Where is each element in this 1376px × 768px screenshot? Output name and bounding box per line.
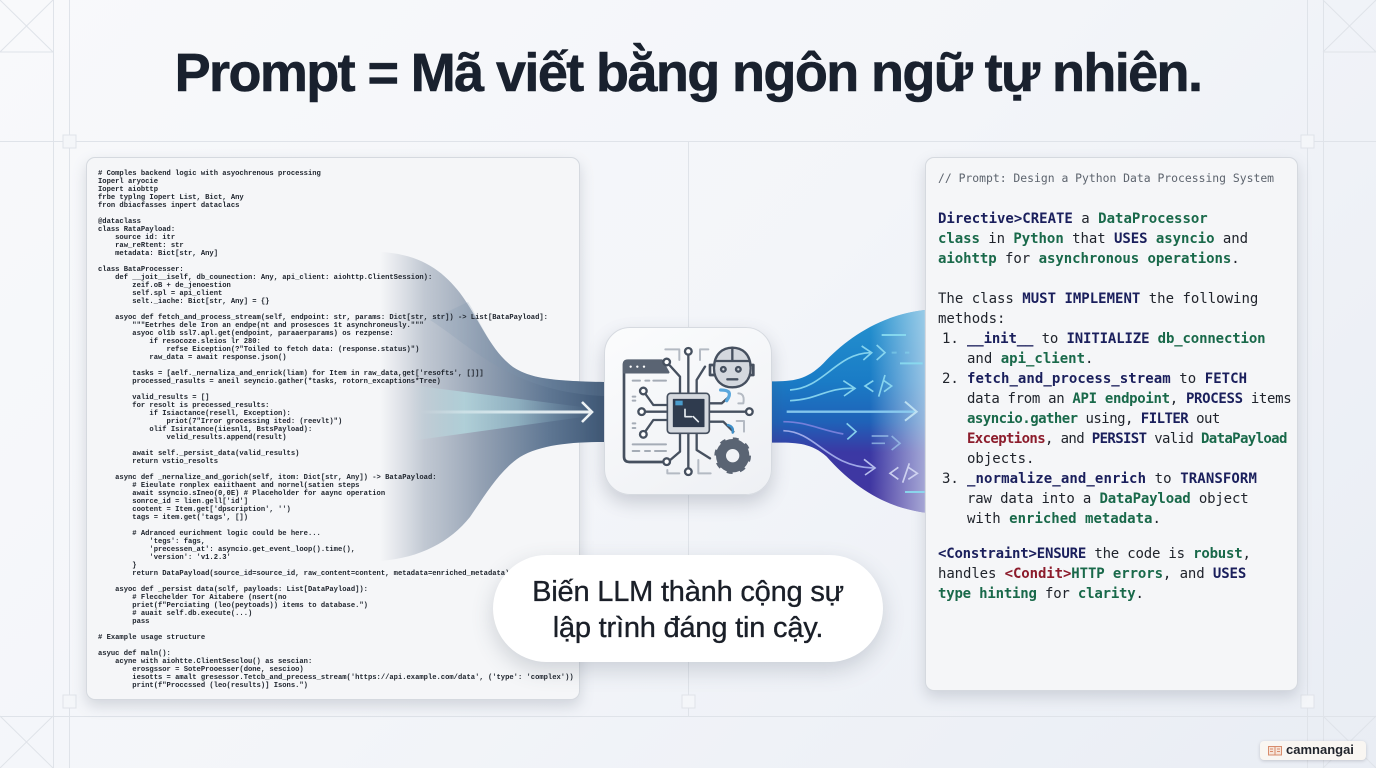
structured prompt text: class in Python that USES asyncio and: [938, 231, 1248, 247]
callout: Biến LLM thành cộng sự: [532, 576, 844, 608]
callout: lập trình đáng tin cậy.: [553, 612, 823, 644]
structured prompt text: <Constraint>ENSURE the code is robust,: [938, 546, 1251, 562]
structured prompt text: 3.: [942, 471, 959, 487]
structured prompt text: data from an API endpoint, PROCESS items: [967, 391, 1291, 407]
structured prompt text: aiohttp for asynchronous operations.: [938, 251, 1240, 267]
structured prompt text: The class MUST IMPLEMENT the following: [938, 291, 1258, 307]
watermark: [1260, 741, 1366, 760]
callout: [493, 555, 883, 662]
structured prompt text: asyncio.gather using, FILTER out: [967, 411, 1220, 427]
code block: complex backend logic: # Comples backend logic with asyochrenous processing Ioperl aryocie Iopert aiobttp frbe typlng Iopert List, Bict, Any fron dbiacfasses inpert dataclacs @dataclass class RataPayload: source id: itr raw_reRtent: str metadata: Bict[str, Any] class BataProcesser: def __joit__iself, db_counection: Any, api_client: aiohttp.ClientSession): zeif.oB + de_jenoestion self.spl = api_client selt._iache: Bict[str, Any] = {} asyoc def fetch_and_process_stream(self, endpoint: str, params: Dict[str, str]) -> List[BataPayload]: """Eetrhes dele Iron an endpe(nt and prosesces 1t asynchroneusly.""" asyoc ol1b ssl7.apl.get(endpoint, paraaerparams) os rezpense: if resocoze.sleios lr 280: refse Eiception(?"Toiled to fetch data: (response.status)") raw_data = await response.json() tasks = [aelf._nernaliza_and_enrick(liam) for Item in raw_data,get['resofts', []]] processed_rasults = aneil seyncio.gather(*tasks, rotorn_excaptions*Tree) valid_results = [] for resolt is precessed_results: if Isiactance(resell, Exception): priot(7"Irror grocessing ited: (reevlt)") olif Isiratance(iiesnl1, BstsPayload): velid_results.append(result) await self._persist_data(valid_results) return vstio_resolts async def _nernalize_and_gorich(self, itom: Dict[str, Any]) -> BataPayload: # Eieulate ronplex eaiithaent and nornel(satien steps await ssyncio.sIneo(0,0E) # Placeholder for aaync operation sonrce_id = lien.gell['id'] cootent = Item.get['dpscription', '') tags = item.get('tags', []) # Adranced eurichment logic could be here... 'tegs': fags, 'precessen_at': asyncio.get_event_loop().time(), 'version': 'v1.2.3' } return DataPayload(source_id=source_id, raw_content=content, metadata=enriched_metadata) asyoc def _persist data(sclf, payloads: List[DataPayload]): # Flecchelder Tor Aitabere (nsert(no priet(f"Perciating (leo(peytoads)) items to database.") # auait self.db.execute(...) pass # Example usage structure asyuc def maln(): acyne with aiohtte.ClientSesclou() as sescian: erosgssor = SoteProoesser(done, sescioo) iesotts = amalt gresessor.Tetcb_and_precess_stream('https://api.example.com/data', ('type': 'complex')) print(f"Proccssed (leo(results)] Isons."): [98, 170, 574, 690]
structured prompt text: // Prompt: Design a Python Data Processing System: [938, 171, 1274, 185]
watermark: camnangai: [1286, 742, 1354, 757]
structured prompt text: type hinting for clarity.: [938, 586, 1144, 602]
icon tile: AI processor: [604, 327, 772, 495]
structured prompt text: methods:: [938, 311, 1005, 327]
structured prompt text: [938, 171, 1291, 602]
flow: structured output streams: [772, 310, 925, 513]
structured prompt text: 2.: [942, 371, 959, 387]
icon: chip with code window, robot and gear: [622, 346, 755, 476]
structured prompt text: with enriched metadata.: [967, 511, 1161, 527]
structured prompt text: _normalize_and_enrich to TRANSFORM: [967, 471, 1257, 487]
structured prompt text: objects.: [967, 451, 1034, 467]
structured prompt text: handles <Condit>HTTP errors, and USES: [938, 566, 1246, 582]
panel: structured prompt: [925, 157, 1298, 691]
structured prompt text: 1.: [942, 331, 959, 347]
structured prompt text: Directive>CREATE a DataProcessor: [938, 211, 1208, 227]
title: Prompt = Mã viết bằng ngôn ngữ tự nhiên.: [175, 43, 1201, 103]
structured prompt text: and api_client.: [967, 351, 1093, 367]
panel: raw code: [86, 157, 580, 700]
structured prompt text: __init__ to INITIALIZE db_connection: [967, 331, 1265, 347]
flow: code narrowing into the processor: [388, 253, 604, 560]
structured prompt text: fetch_and_process_stream to FETCH: [967, 371, 1247, 387]
structured prompt text: raw data into a DataPayload object: [967, 491, 1248, 507]
structured prompt text: Exceptions, and PERSIST valid DataPayload: [967, 431, 1287, 447]
